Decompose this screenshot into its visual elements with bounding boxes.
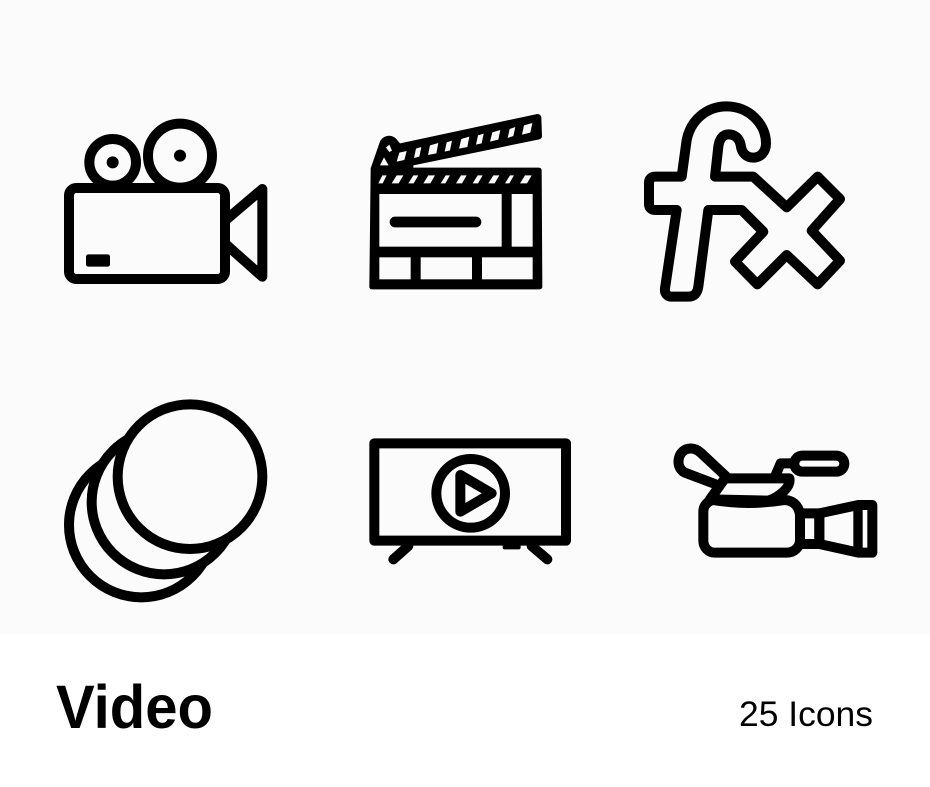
icon: overlapping circles bbox=[69, 404, 262, 597]
icon: camcorder bbox=[678, 448, 872, 553]
icon: clapperboard bbox=[369, 114, 542, 289]
icon: tv with play button bbox=[374, 443, 566, 559]
icon: film camera bbox=[69, 124, 262, 279]
title: Video bbox=[56, 673, 213, 741]
icon count label: 25 Icons bbox=[739, 695, 873, 734]
icon: fx effects bbox=[649, 106, 840, 297]
